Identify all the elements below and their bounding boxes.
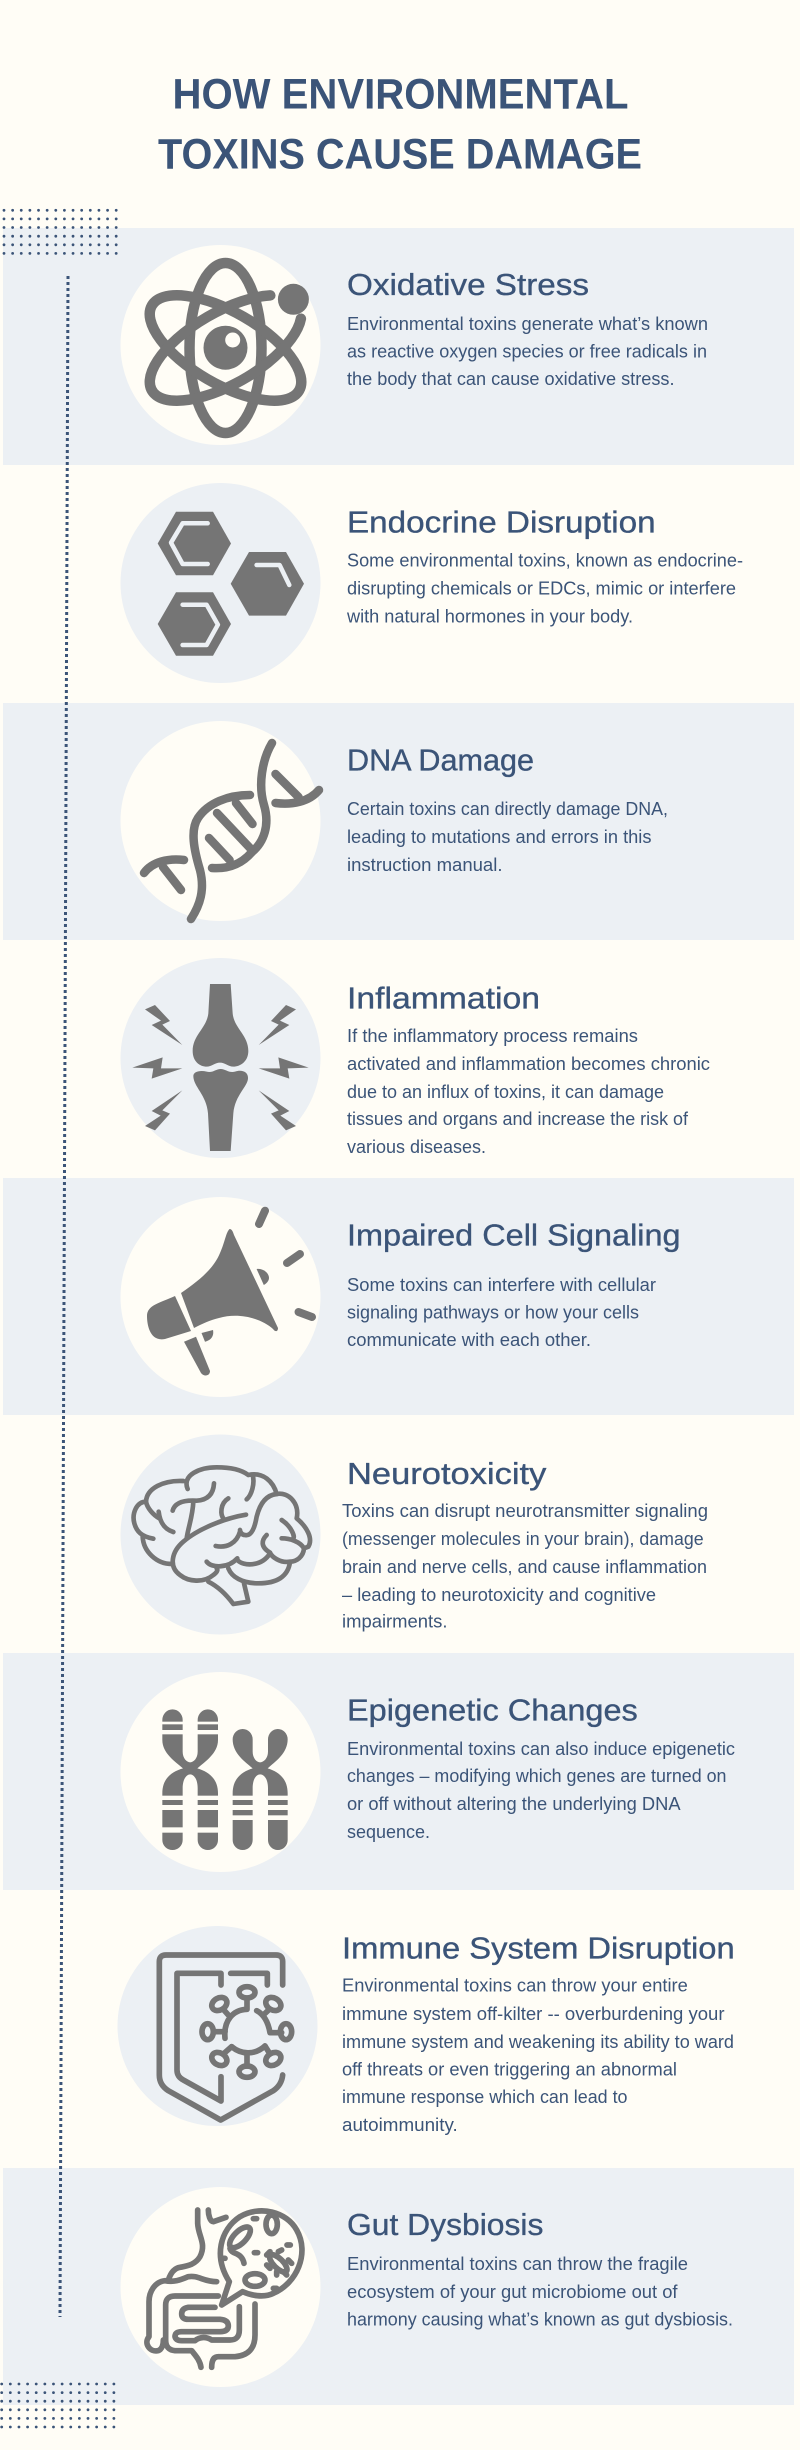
text: dna damage: leading to mutations and errors in this bbox=[347, 827, 652, 847]
text: neurotoxicity: impairments. bbox=[342, 1612, 448, 1632]
text: epigenetic changes: sequence. bbox=[347, 1822, 430, 1842]
heading: inflammation: Inflammation bbox=[347, 981, 540, 1015]
text: neurotoxicity: (messenger molecules in your brain), damage bbox=[342, 1529, 704, 1549]
text: epigenetic changes: or off without altering the underlying DNA bbox=[347, 1794, 681, 1814]
panel: endocrine disruption bbox=[120, 483, 743, 683]
text: endocrine disruption: disrupting chemicals or EDCs, mimic or interfere bbox=[347, 578, 736, 598]
dot grid: top bbox=[4, 210, 118, 253]
text: epigenetic changes: Environmental toxins can also induce epigenetic bbox=[347, 1739, 735, 1759]
text: epigenetic changes: changes – modifying which genes are turned on bbox=[347, 1766, 726, 1786]
dot grid: bottom bbox=[2, 2384, 116, 2427]
text: neurotoxicity bbox=[342, 1501, 708, 1632]
panel: gut dysbiosis bbox=[3, 2168, 794, 2405]
text: immune system disruption: immune system off-kilter -- overburdening your bbox=[342, 2004, 724, 2024]
text: immune system disruption: immune system and weakening its ability to ward bbox=[342, 2032, 734, 2052]
heading: impaired cell signaling: Impaired Cell Signaling bbox=[347, 1219, 681, 1253]
text: endocrine disruption: Some environmental toxins, known as endocrine- bbox=[347, 551, 743, 571]
text: immune system disruption: Environmental toxins can throw your entire bbox=[342, 1976, 688, 1996]
text: neurotoxicity: brain and nerve cells, and cause inflammation bbox=[342, 1557, 707, 1577]
text: endocrine disruption: with natural hormones in your body. bbox=[346, 606, 633, 626]
panel: immune system disruption bbox=[118, 1926, 735, 2135]
text: dna damage: Certain toxins can directly damage DNA, bbox=[347, 799, 668, 819]
text: inflammation: due to an influx of toxins, it can damage bbox=[347, 1082, 664, 1102]
text: dna damage: instruction manual. bbox=[347, 855, 502, 875]
text: inflammation: If the inflammatory process remains bbox=[347, 1026, 638, 1046]
text: neurotoxicity: – leading to neurotoxicity and cognitive bbox=[342, 1585, 656, 1605]
icon: shield with virus bbox=[159, 1955, 292, 2120]
text: immune system disruption bbox=[342, 1976, 734, 2135]
title: HOW ENVIRONMENTAL bbox=[172, 71, 628, 119]
icon: gut with microbiome bubble bbox=[147, 2210, 302, 2367]
text: inflammation bbox=[347, 1026, 710, 1157]
heading: oxidative stress: Oxidative Stress bbox=[347, 268, 589, 302]
text: oxidative stress bbox=[347, 314, 708, 389]
text: impaired cell signaling: Some toxins can interfere with cellular bbox=[347, 1275, 656, 1295]
panel: dna damage bbox=[3, 703, 794, 940]
panel: impaired cell signaling bbox=[3, 1178, 794, 1415]
text: impaired cell signaling: signaling pathways or how your cells bbox=[347, 1302, 639, 1322]
text: impaired cell signaling bbox=[347, 1275, 656, 1350]
panel: oxidative stress bbox=[3, 228, 794, 465]
heading: gut dysbiosis: Gut Dysbiosis bbox=[347, 2208, 543, 2242]
text: endocrine disruption bbox=[346, 551, 743, 626]
text: oxidative stress: as reactive oxygen species or free radicals in bbox=[347, 342, 707, 362]
icon: chromosomes bbox=[160, 1709, 290, 1850]
panel: epigenetic changes bbox=[3, 1653, 794, 1890]
text: neurotoxicity: Toxins can disrupt neurotransmitter signaling bbox=[342, 1501, 708, 1521]
text: gut dysbiosis: harmony causing what’s known as gut dysbiosis. bbox=[347, 2310, 733, 2330]
text: immune system disruption: immune response which can lead to bbox=[342, 2087, 628, 2107]
icon: hexagons bbox=[158, 512, 304, 656]
heading: epigenetic changes: Epigenetic Changes bbox=[347, 1694, 638, 1728]
text: immune system disruption: off threats or even triggering an abnormal bbox=[342, 2059, 677, 2079]
text: inflammation: various diseases. bbox=[347, 1137, 486, 1157]
text: inflammation: tissues and organs and increase the risk of bbox=[347, 1109, 689, 1129]
panel: neurotoxicity bbox=[120, 1434, 708, 1634]
title bbox=[158, 71, 642, 178]
icon: dna helix bbox=[144, 743, 319, 919]
heading: dna damage: DNA Damage bbox=[347, 744, 534, 778]
text: oxidative stress: the body that can cause oxidative stress. bbox=[347, 369, 674, 389]
text: inflammation: activated and inflammation becomes chronic bbox=[347, 1054, 710, 1074]
icon: atom bbox=[134, 263, 317, 433]
text: oxidative stress: Environmental toxins generate what’s known bbox=[347, 314, 708, 334]
panel: inflammation bbox=[120, 958, 710, 1158]
icon: megaphone bbox=[147, 1211, 312, 1375]
text: gut dysbiosis: Environmental toxins can throw the fragile bbox=[347, 2254, 688, 2274]
text: epigenetic changes bbox=[347, 1739, 735, 1842]
icon: brain bbox=[134, 1467, 310, 1604]
dotted timeline bbox=[60, 276, 68, 2317]
heading: immune system disruption: Immune System Disruption bbox=[342, 1932, 735, 1966]
text: dna damage bbox=[347, 799, 668, 875]
title: TOXINS CAUSE DAMAGE bbox=[158, 130, 642, 178]
heading: neurotoxicity: Neurotoxicity bbox=[347, 1457, 547, 1491]
heading: endocrine disruption: Endocrine Disruption bbox=[347, 506, 656, 540]
text: gut dysbiosis: ecosystem of your gut microbiome out of bbox=[347, 2282, 679, 2302]
text: impaired cell signaling: communicate with each other. bbox=[347, 1330, 591, 1350]
icon: inflamed joint bbox=[132, 984, 309, 1151]
text: immune system disruption: autoimmunity. bbox=[342, 2115, 458, 2135]
text: gut dysbiosis bbox=[347, 2254, 733, 2330]
